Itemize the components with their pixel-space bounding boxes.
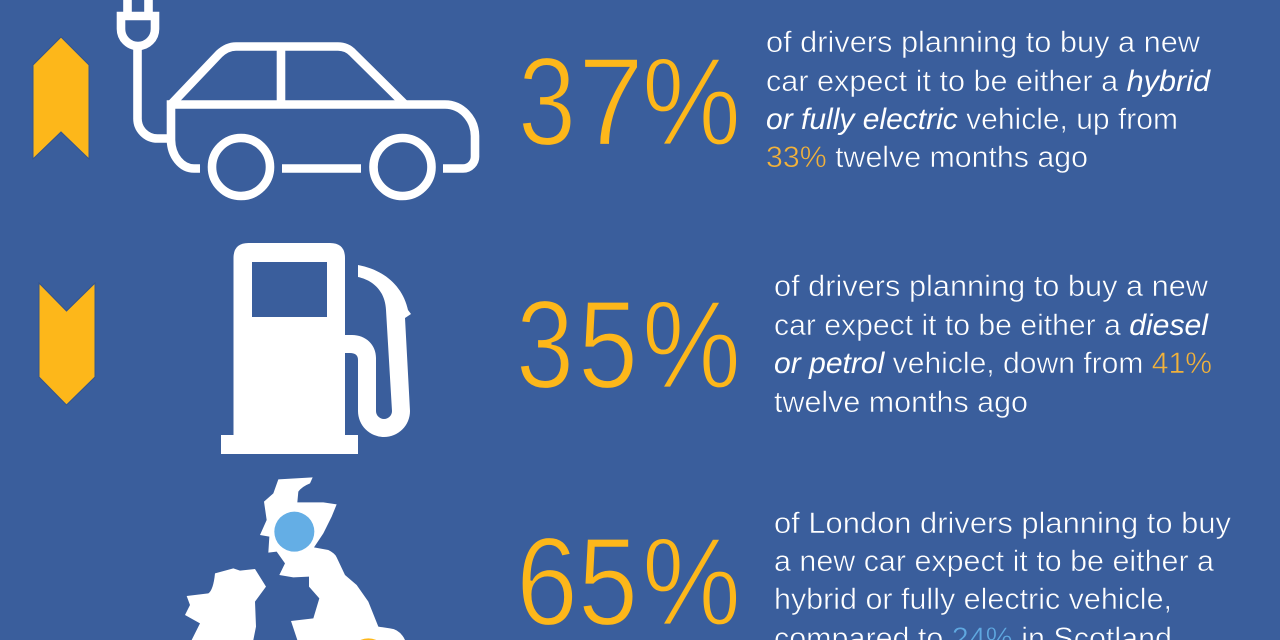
text: London vs Scotland: of London drivers planning to buy bbox=[774, 507, 1231, 540]
text: diesel or petrol: or petrol vehicle, down from 41% bbox=[774, 347, 1212, 380]
stat: 37%: 3 bbox=[518, 33, 576, 172]
map: Great Britain bbox=[260, 477, 408, 640]
stat: 37%: 7 bbox=[578, 33, 644, 172]
icon: down arrow bbox=[39, 283, 95, 405]
stat: 35%: % bbox=[642, 276, 741, 415]
text: hybrid or electric: or fully electric vehicle, up from bbox=[766, 103, 1178, 136]
text: hybrid or electric: of drivers planning to buy a new bbox=[766, 26, 1200, 59]
text: London vs Scotland bbox=[774, 507, 1231, 640]
icon: up arrow bbox=[33, 37, 89, 159]
text: London vs Scotland: a new car expect it to be either a bbox=[774, 545, 1214, 578]
text: diesel or petrol: twelve months ago bbox=[774, 386, 1028, 419]
marker: London bbox=[348, 638, 388, 640]
stat: 35%: 5 bbox=[578, 276, 638, 415]
text: London vs Scotland: hybrid or fully electric vehicle, bbox=[774, 583, 1172, 616]
text: hybrid or electric bbox=[766, 26, 1211, 174]
text: hybrid or electric: 33% twelve months ago bbox=[766, 141, 1088, 174]
text: diesel or petrol bbox=[774, 270, 1212, 419]
text: diesel or petrol: of drivers planning to buy a new bbox=[774, 270, 1208, 303]
stat: 65% bbox=[516, 513, 741, 640]
icon: fuel pump bbox=[221, 243, 411, 454]
stat: 37%: % bbox=[642, 33, 741, 172]
text: hybrid or electric: car expect it to be either a hybrid bbox=[766, 65, 1211, 98]
icon: plug-in electric car bbox=[121, 0, 475, 196]
marker: Scotland bbox=[274, 512, 314, 552]
map: Ireland bbox=[185, 568, 266, 640]
stat: 35%: 3 bbox=[516, 276, 574, 415]
text: diesel or petrol: car expect it to be either a diesel bbox=[774, 309, 1209, 342]
stat: 37% bbox=[518, 33, 741, 172]
icon: map of UK and Ireland bbox=[185, 477, 408, 640]
stat: 35% bbox=[516, 276, 741, 415]
